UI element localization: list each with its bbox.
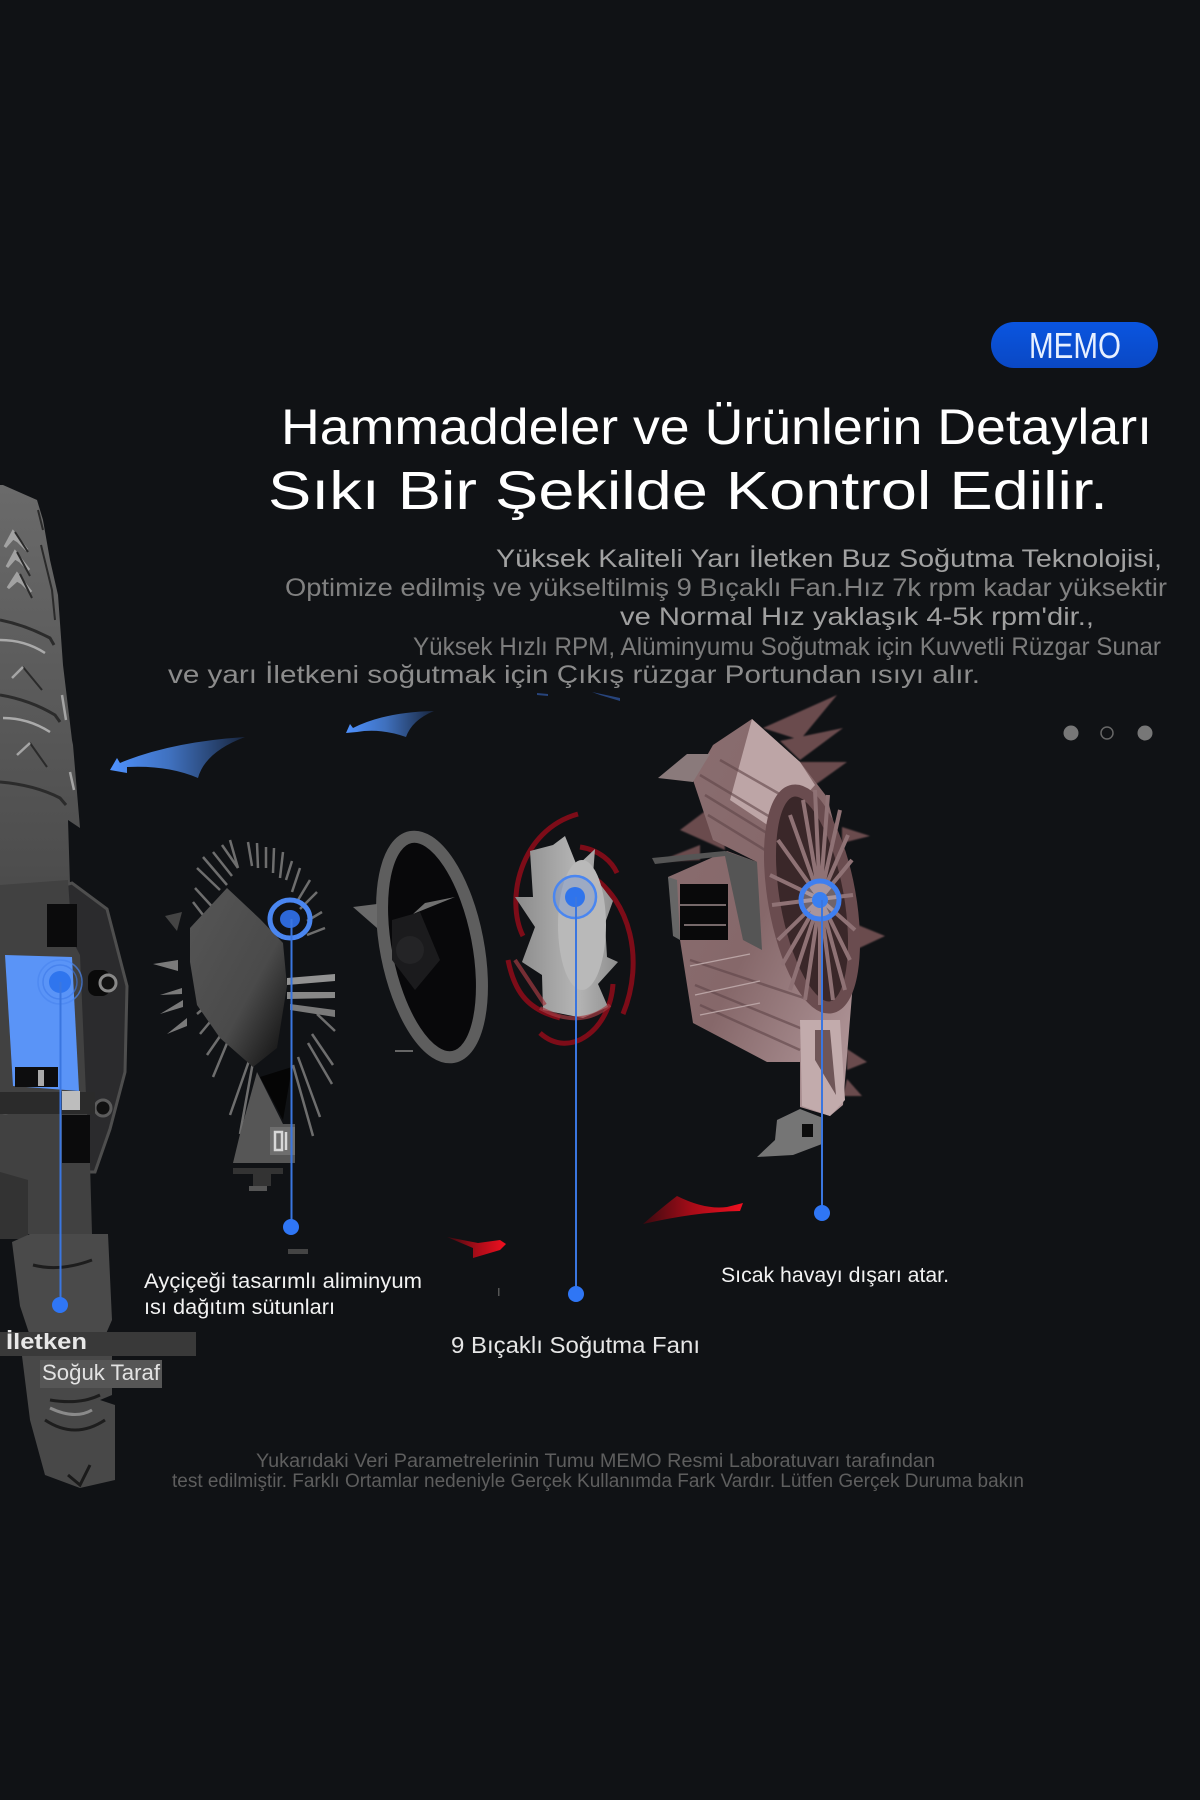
band lower segments [12, 1234, 112, 1336]
red airflow arrows [447, 1196, 743, 1296]
MEMO badge: MEMO [1029, 325, 1121, 366]
pointer: cold plate [38, 960, 82, 1313]
fan blades [515, 836, 618, 1018]
footer note [172, 1451, 1024, 1492]
label: conductor: İletken [6, 1329, 87, 1354]
fan wheel [755, 784, 869, 1014]
label: conductor [0, 1329, 196, 1356]
vent frame [652, 851, 762, 950]
heatsink core [190, 888, 287, 1067]
footer note: test edilmiştir. Farklı Ortamlar nedeniyle Gerçek Kullanımda Fark Vardır. Lütfen Gerçek Duruma bakın [172, 1471, 1024, 1492]
heatsink stem [233, 1072, 295, 1163]
label: fan: 9 Bıçaklı Soğutma Fanı [451, 1332, 700, 1358]
right mounting posts [0, 970, 116, 1116]
description text: ve yarı İletkeni soğutmak için Çıkış rüzgar Portundan ısıyı alır. [168, 660, 980, 689]
motion streaks [657, 695, 885, 1096]
footer note: Yukarıdaki Veri Parametrelerinin Tumu MEMO Resmi Laboratuvarı tarafından [256, 1451, 935, 1472]
red airflow swirls [508, 814, 633, 1043]
description text: Optimize edilmiş ve yükseltilmiş 9 Bıçaklı Fan.Hız 7k rpm kadar yüksektir [285, 574, 1167, 602]
description text: Yüksek Hızlı RPM, Alüminyumu Soğutmak için Kuvvetli Rüzgar Sunar [413, 633, 1161, 661]
title [268, 399, 1152, 521]
heatsink fins [193, 840, 335, 1136]
label: heatsink: ısı dağıtım sütunları [144, 1296, 335, 1319]
description text: ve Normal Hız yaklaşık 4-5k rpm'dir., [620, 603, 1094, 631]
pointer: fan [554, 876, 596, 1302]
9-blade cooling fan [508, 814, 633, 1043]
label: heatsink [144, 1270, 422, 1319]
band upper segments [0, 485, 80, 885]
cold plate [5, 955, 79, 1091]
lower bracket [757, 1109, 823, 1157]
carousel dots [1064, 726, 1152, 740]
watch body shell [0, 883, 127, 1172]
phone cooler band and semiconductor module [0, 485, 127, 1488]
label: cold side: Soğuk Taraf [42, 1360, 161, 1385]
sunflower heatsink [153, 840, 335, 1254]
title: Hammaddeler ve Ürünlerin Detayları [281, 399, 1152, 455]
title: Sıkı Bir Şekilde Kontrol Edilir. [268, 461, 1108, 521]
pointer: exhaust [801, 881, 839, 1221]
fan bracket ring [353, 828, 499, 1066]
description text: Yüksek Kaliteli Yarı İletken Buz Soğutma Teknolojisi, [496, 544, 1162, 573]
exhaust housing [652, 695, 885, 1157]
label: heatsink: Ayçiçeği tasarımlı aliminyum [144, 1270, 422, 1293]
left wing [658, 754, 710, 782]
pointer: heatsink [270, 900, 310, 1235]
housing body [668, 719, 855, 1116]
label: exhaust: Sıcak havayı dışarı atar. [721, 1264, 949, 1287]
blue airflow arrows [110, 692, 620, 778]
MEMO badge [991, 322, 1158, 368]
description text [168, 544, 1167, 689]
